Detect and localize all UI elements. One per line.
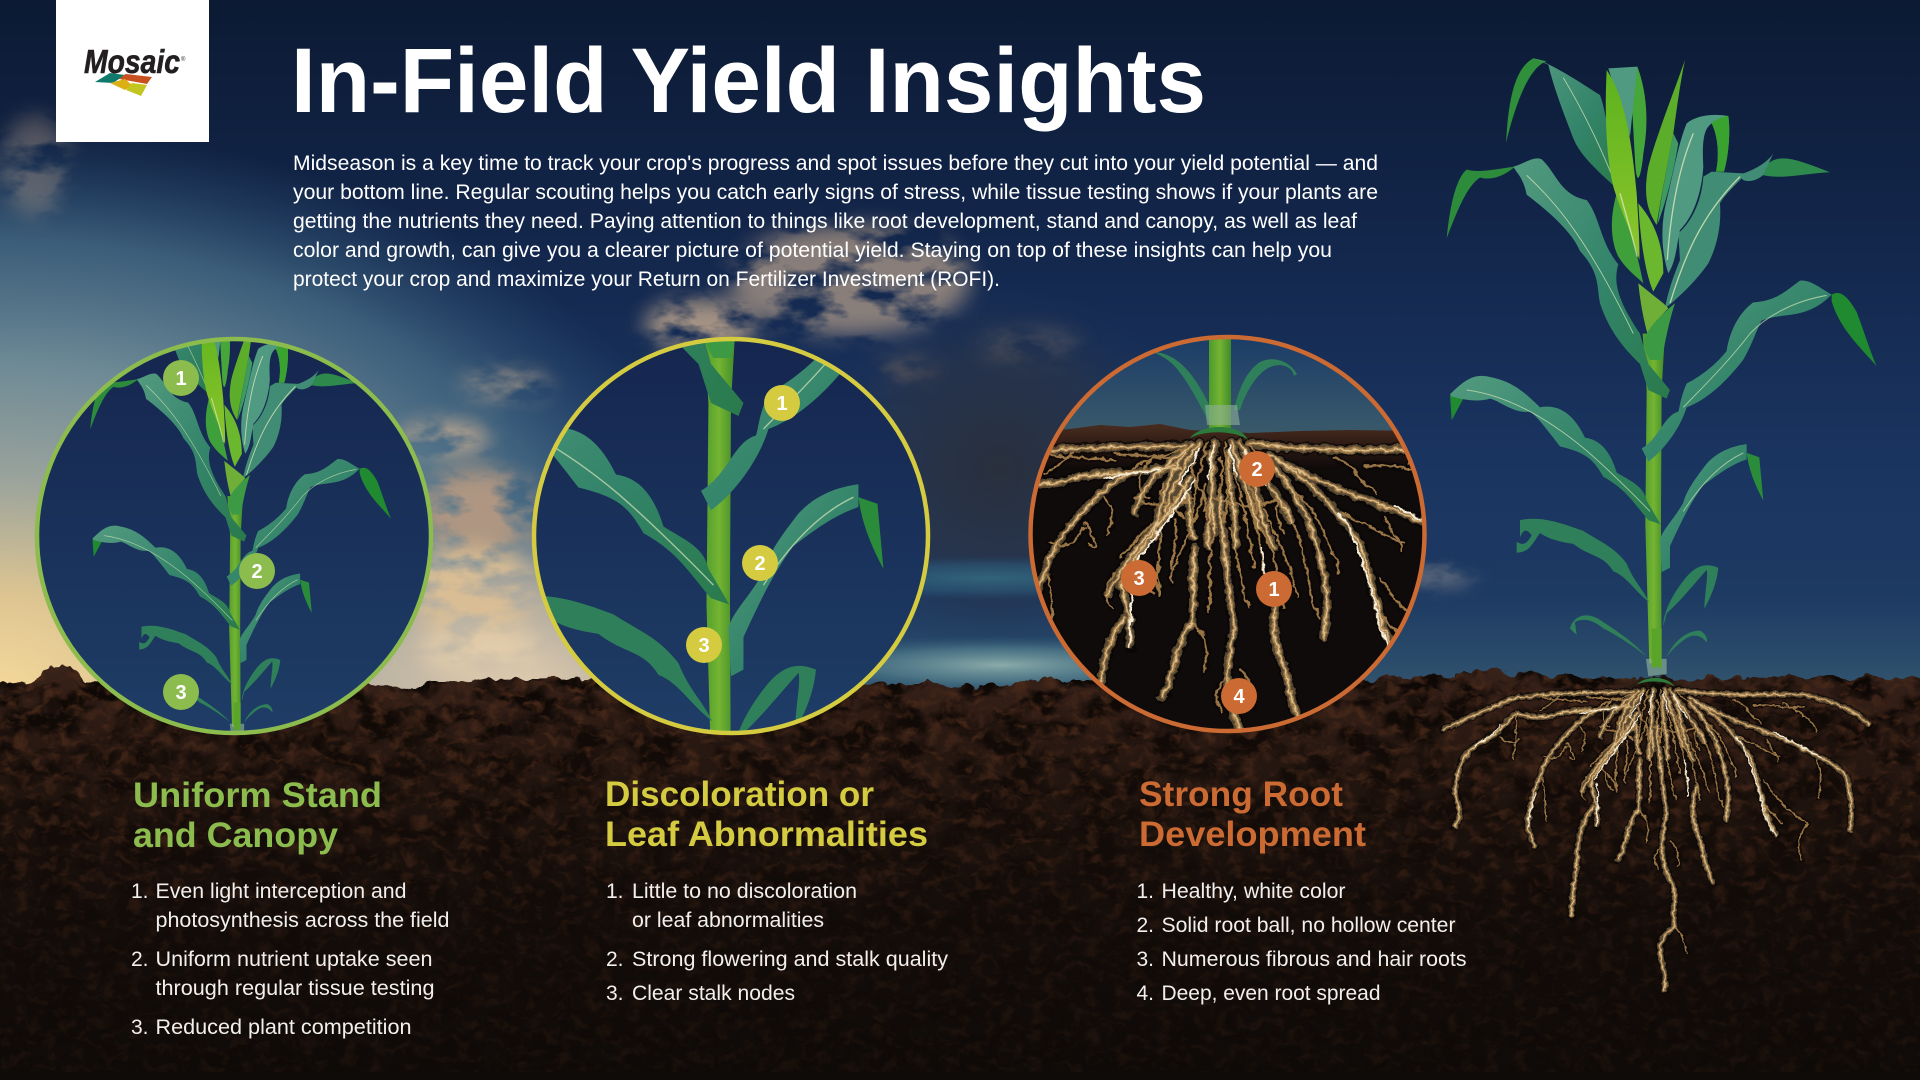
badge 1: [1256, 571, 1292, 607]
list: uniform stand: 3.: [131, 1016, 149, 1039]
intro paragraph: Midseason is a key time to track your crop's progress and spot issues before they cut into your yield potential — and: [293, 151, 1378, 175]
heading: discoloration: Leaf Abnormalities: [605, 815, 928, 854]
badge 2: [742, 545, 778, 581]
panel: root circle: [1028, 334, 1427, 734]
list: uniform stand: Uniform nutrient uptake seen: [156, 948, 432, 971]
badge 1: [163, 360, 199, 396]
logo: ®: [181, 56, 186, 63]
badge 2: 2: [251, 561, 263, 583]
badge 3: 3: [1133, 568, 1145, 590]
list: discoloration: or leaf abnormalities: [632, 909, 824, 932]
badge 2: [239, 553, 275, 589]
badge 2: 2: [754, 553, 766, 575]
heading: uniform stand and canopy: and Canopy: [133, 816, 339, 855]
intro paragraph: your bottom line. Regular scouting helps you catch early signs of stress, while tissue testing shows if your plants are: [293, 180, 1378, 204]
badge 1: 1: [1268, 579, 1280, 601]
list: root development: 2.: [1136, 914, 1154, 937]
logo: [56, 0, 209, 142]
badge 4: [1221, 678, 1257, 714]
list: root development: Numerous fibrous and hair roots: [1162, 948, 1466, 971]
list: discoloration: Strong flowering and stalk quality: [632, 948, 949, 971]
list: uniform stand: photosynthesis across the field: [156, 909, 450, 932]
logo: Mosaic: [84, 43, 180, 80]
list: uniform stand: through regular tissue testing: [156, 977, 434, 1000]
badge 1: [764, 385, 800, 421]
list: root development: Healthy, white color: [1162, 880, 1346, 903]
intro paragraph: color and growth, can give you a clearer picture of potential yield. Staying on top of these insights can help you: [293, 238, 1332, 262]
list: root development: Solid root ball, no hollow center: [1162, 914, 1456, 937]
panel: discoloration circle: [532, 336, 930, 736]
background: soil: [0, 667, 1920, 1080]
title: In-Field Yield Insights: [291, 30, 1206, 132]
list: discoloration: [606, 880, 949, 1005]
illustration: full corn plant with roots: [1443, 58, 1877, 990]
list: discoloration: Clear stalk nodes: [632, 982, 795, 1005]
badge 3: 3: [175, 682, 187, 704]
list: discoloration: Little to no discoloration: [632, 880, 857, 903]
heading: strong root development: [1139, 775, 1366, 854]
badge 3: 3: [698, 635, 710, 657]
intro paragraph: protect your crop and maximize your Return on Fertilizer Investment (ROFI).: [293, 267, 1000, 291]
panel: uniform stand circle: [36, 303, 432, 744]
list: uniform stand: Even light interception and: [156, 880, 406, 903]
heading: uniform stand and canopy: Uniform Stand: [133, 776, 382, 815]
background: clouds: [1, 115, 1475, 674]
list: discoloration: 2.: [606, 948, 624, 971]
list: uniform stand: Reduced plant competition: [156, 1016, 412, 1039]
badge 2: [1239, 451, 1275, 487]
heading: uniform stand and canopy: [133, 776, 382, 855]
list: discoloration: 3.: [606, 982, 624, 1005]
badge 3: [163, 674, 199, 710]
heading: discoloration: [605, 775, 928, 854]
heading: strong root development: Strong Root: [1139, 775, 1343, 814]
list: uniform stand: [131, 880, 450, 1039]
heading: strong root development: Development: [1139, 815, 1366, 854]
list: root development: 4.: [1136, 982, 1154, 1005]
badge 1: 1: [776, 393, 788, 415]
badge 2: 2: [1251, 459, 1263, 481]
list: root development: 1.: [1136, 880, 1154, 903]
badge 3: [686, 627, 722, 663]
heading: discoloration: Discoloration or: [605, 775, 874, 814]
list: root development: 3.: [1136, 948, 1154, 971]
list: root development: Deep, even root spread: [1162, 982, 1380, 1005]
list: discoloration: 1.: [606, 880, 624, 903]
intro paragraph: getting the nutrients they need. Paying attention to things like root development, stand and canopy, as well as leaf: [293, 209, 1357, 233]
badge 3: [1121, 560, 1157, 596]
intro paragraph: [293, 151, 1378, 291]
list: uniform stand: 2.: [131, 948, 149, 971]
list: root development: [1136, 880, 1466, 1005]
background: soil bottom edge: [0, 1072, 1920, 1080]
badge 1: 1: [175, 368, 187, 390]
badge 4: 4: [1233, 686, 1245, 708]
list: uniform stand: 1.: [131, 880, 149, 903]
